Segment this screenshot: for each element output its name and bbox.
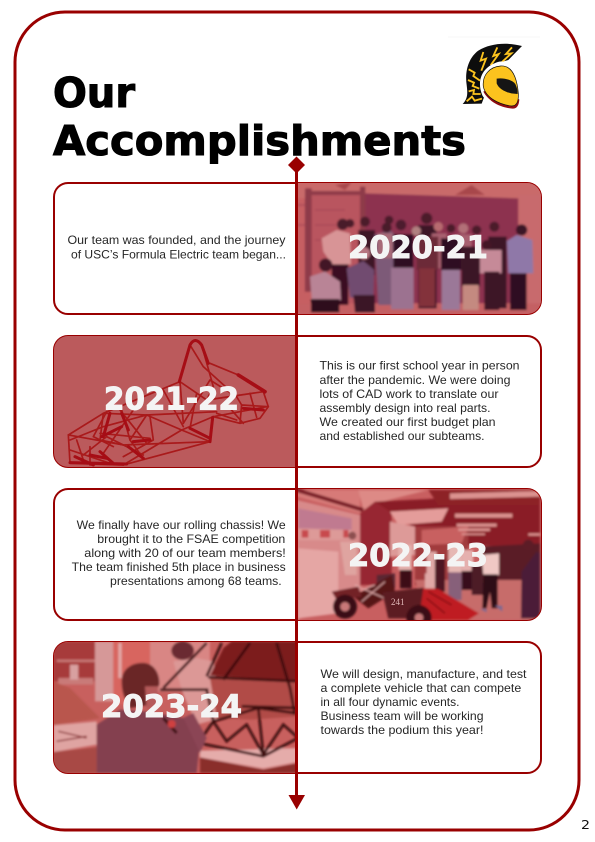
photo: team group photo [295, 182, 542, 315]
text: rolling chassis: presentations among 68 teams. [110, 574, 282, 588]
text: plans: towards the podium this year! [320, 723, 484, 737]
panel: 2021-22 description card [54, 336, 541, 467]
student [97, 710, 200, 773]
icon: timeline arrowhead [288, 795, 305, 810]
title: Our [53, 69, 136, 117]
text: founding: Our team was founded, and the journey [68, 233, 286, 247]
text: first school year: after the pandemic. We were doing [320, 373, 510, 387]
label: 2020-21: 2020-21 [348, 230, 488, 266]
text: first school year: We created our first budget plan [320, 415, 496, 429]
text: rolling chassis: We finally have our rolling chassis! We [77, 518, 286, 532]
frame tubes [160, 643, 298, 756]
text: first school year: lots of CAD work to translate our [320, 387, 499, 401]
front standing [374, 230, 395, 305]
image: chassis CAD render [54, 336, 296, 467]
text: rolling chassis: The team finished 5th place in business [72, 560, 286, 574]
title: Accomplishments [53, 117, 466, 165]
text: founding [68, 233, 286, 262]
kneeling [310, 272, 341, 300]
panel: 2020-21 description card [54, 183, 541, 314]
page number: 2 [581, 817, 590, 832]
title [53, 69, 466, 165]
photo: FSAE garage with car [297, 489, 541, 630]
label: 2021-22: 2021-22 [104, 382, 239, 418]
text: rolling chassis [72, 518, 286, 588]
text: plans: Business team will be working [320, 709, 484, 723]
panel: 2022-23 description card [54, 489, 541, 620]
text: rolling chassis: brought it to the FSAE competition [97, 532, 285, 546]
text: first school year [320, 358, 520, 443]
text: plans: We will design, manufacture, and test [320, 667, 527, 681]
timeline arrow [288, 156, 305, 810]
label: 2023-24: 2023-24 [101, 689, 242, 725]
icon: trojan helmet logo [448, 37, 540, 109]
text: plans: a complete vehicle that can compete [320, 681, 522, 695]
people [340, 542, 357, 575]
photo: student working on chassis [53, 641, 298, 773]
text: plans [320, 667, 527, 737]
text: first school year: assembly design into real parts. [320, 401, 490, 415]
icon: timeline start diamond [288, 156, 305, 174]
text: rolling chassis: along with 20 of our team members! [84, 546, 286, 560]
panel: 2023-24 description card [54, 642, 541, 773]
text: first school year: This is our first school year in person [320, 358, 520, 372]
man white shirt [332, 262, 348, 305]
text: plans: in all four dynamic events. [320, 695, 460, 709]
car [353, 575, 395, 608]
text: first school year: and established our subteams. [320, 429, 484, 443]
label: 2022-23: 2022-23 [348, 538, 488, 574]
back row [346, 213, 499, 235]
car number: 241 [391, 597, 404, 607]
text: founding: of USC’s Formula Electric team began... [71, 248, 286, 262]
